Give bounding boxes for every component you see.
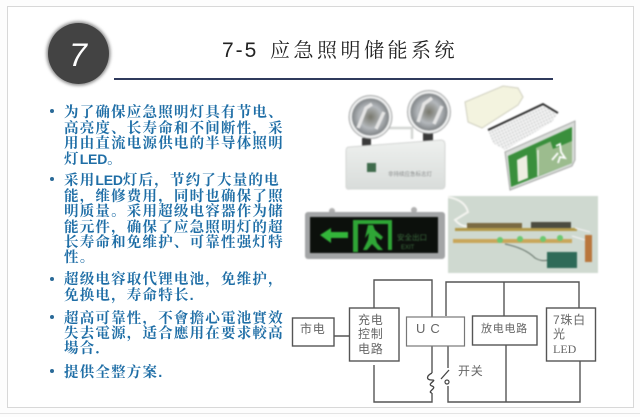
bullet 2: 性。 (64, 248, 95, 266)
bullet 1: 用由直流电源供电的半导体照明 (64, 134, 284, 152)
box: mains: 市电 (300, 321, 325, 336)
bullet 1: 高亮度、长寿命和不间断性，采 (64, 119, 284, 137)
photo: ceiling lamp and exit sign (465, 86, 575, 190)
chapter number badge: 7 (69, 37, 88, 73)
bullet 3 (50, 270, 284, 304)
box: UC: UC (416, 321, 445, 336)
bullet 2: 采用LED灯后，节约了大量的电 (64, 171, 280, 189)
box: charge control: 充电 (358, 312, 383, 327)
box: discharge circuit (472, 316, 537, 345)
bullet 2: 明质量。采用超级电容器作为储 (64, 202, 284, 220)
title underline (114, 78, 553, 80)
box: LED: 光 (553, 327, 566, 341)
bullet 2 (50, 171, 284, 266)
title: 应急照明储能系统 (270, 39, 458, 62)
bullet 3: 超级电容取代锂电池，免维护， (64, 270, 284, 288)
switch (441, 370, 449, 384)
photo: twin-head emergency lamp (346, 90, 450, 189)
bullet 2: 能，维修费用，同时也确保了照 (64, 187, 284, 205)
photo: exit sign with arrow (305, 207, 445, 259)
title: 7-5 (222, 39, 258, 62)
bullet 1: 灯LED。 (63, 151, 123, 168)
photo: exit sign with arrow: EXIT (401, 245, 415, 251)
box: charge control (350, 308, 399, 361)
bullet 2: 长寿命和免维护、可靠性强灯特 (64, 233, 284, 251)
bullet 3: 免换电，寿命特长. (64, 286, 195, 304)
exit sign (505, 121, 575, 190)
lamp grille (488, 104, 558, 150)
box: discharge circuit: 放电电路 (481, 321, 528, 335)
circuit diagram (292, 280, 596, 402)
bullet 5: 提供全整方案. (64, 363, 163, 381)
photo: exit sign with arrow: 安全出口 (397, 232, 427, 242)
box: charge control: 控制 (358, 327, 383, 341)
box: charge control: 电路 (358, 341, 383, 356)
wiring (334, 280, 580, 402)
box: LED: LED (553, 342, 577, 356)
box: LED: 7珠白 (553, 312, 586, 327)
bullet 2: 能元件，确保了应急照明灯的超 (64, 218, 284, 236)
bullet 1 (50, 103, 284, 168)
box: UC (406, 317, 464, 346)
box: mains (292, 318, 334, 346)
chapter number badge (46, 22, 110, 86)
photo: twin-head emergency lamp: 非持续应急标志灯 (388, 170, 433, 178)
switch label: 开关 (458, 364, 483, 378)
bullet 1: 为了确保应急照明灯具有节电、 (64, 103, 284, 121)
bullet 4: 場合． (64, 339, 111, 357)
footer edge line (0, 413, 640, 414)
bullet 4: 超高可靠性，不會擔心電池實效 (64, 309, 284, 327)
bullet 4: 失去電源，适合應用在要求較高 (64, 324, 284, 342)
bullet list (50, 103, 284, 381)
box: LED (546, 308, 596, 361)
ceiling lamp cover (465, 86, 523, 128)
photo: LED circuit boards (448, 196, 598, 273)
bullet 4 (50, 309, 284, 357)
relay coil (428, 373, 434, 393)
